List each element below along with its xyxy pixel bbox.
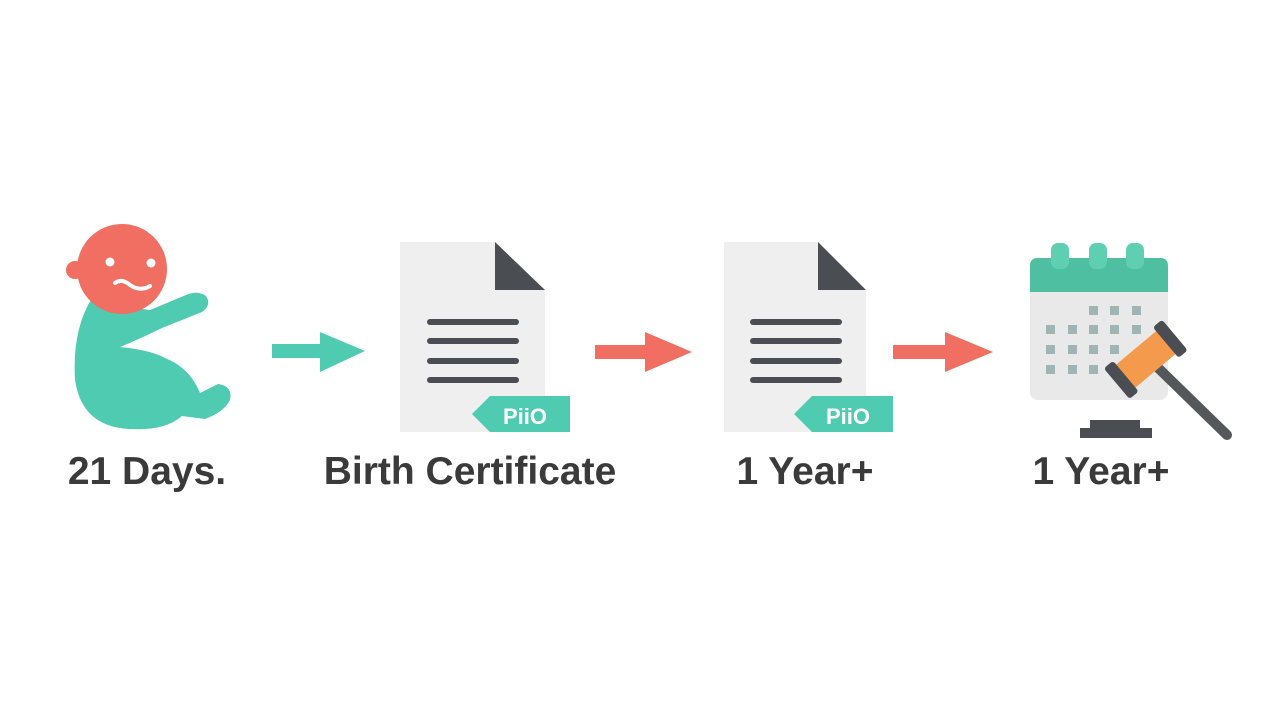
- label: 21 Days.: 21 Days.: [68, 450, 226, 493]
- icon: document 2: [724, 242, 893, 432]
- label: Birth Certificate: Birth Certificate: [324, 450, 616, 493]
- icon: calendar with gavel: [1030, 243, 1227, 438]
- arrow: red 2: [893, 332, 993, 372]
- icon: document 1: PiiO: [503, 404, 547, 429]
- label: 1 Year+ (doc): 1 Year+: [736, 450, 874, 493]
- icon: document 2: PiiO: [826, 404, 870, 429]
- icon: document 1: [400, 242, 570, 432]
- icon: baby: [66, 224, 230, 429]
- label: 1 Year+ (calendar): 1 Year+: [1032, 450, 1170, 493]
- arrow: red 1: [595, 332, 692, 372]
- arrow: teal: [272, 332, 365, 372]
